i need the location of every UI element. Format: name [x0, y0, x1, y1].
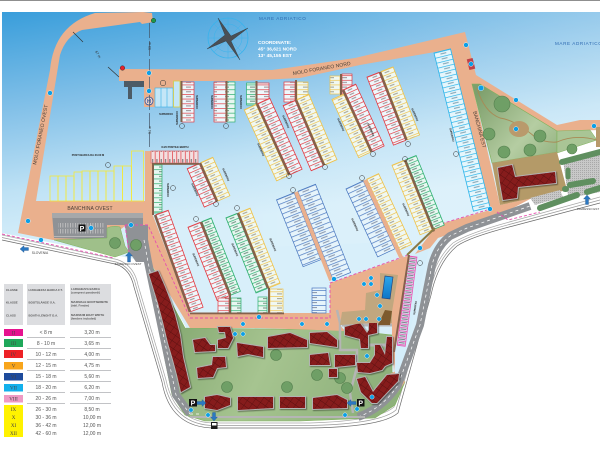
- legend: header panels: MAXIMALE BOOTSBREITE: [71, 300, 108, 304]
- pier captions: SUPERFICI: [268, 237, 277, 252]
- pier captions: SUPERFICI: [195, 95, 199, 109]
- east channel pink berths: [397, 256, 417, 346]
- legend: boat length values: [35, 330, 57, 437]
- legend: boat width values: 12,00 m: [83, 423, 101, 429]
- harbour lights: [120, 18, 156, 70]
- helipad pier: [145, 81, 180, 107]
- pier letter rings: [106, 80, 458, 266]
- quay dashed safety line: [125, 210, 540, 318]
- legend: header panels: KLASSE: [6, 300, 18, 304]
- legend: boat length values: 30 - 36 m: [35, 415, 57, 421]
- moored vehicle: [467, 58, 475, 70]
- legend: boat length values: 15 - 18 m: [35, 374, 57, 380]
- legend: class swatches: X: [12, 416, 16, 421]
- pier captions: SUPERFICI: [166, 183, 170, 197]
- legend: class swatches: III: [11, 342, 16, 347]
- south blue block: [312, 288, 326, 313]
- pier B: [214, 81, 235, 122]
- coordinates: 45° 36,621 NORD: [258, 46, 297, 52]
- pier captions: SUPERFICI: [412, 300, 418, 315]
- pier captions: SUPERFICI: [256, 142, 266, 157]
- legend: boat width values: 8,50 m: [84, 407, 100, 413]
- west garden: [54, 226, 129, 257]
- legend: boat length values: 8 - 10 m: [37, 341, 55, 347]
- coordinates: 13° 45,155 EST: [258, 53, 292, 59]
- service markers: [26, 43, 596, 417]
- place labels: SLOVENIA: [32, 251, 49, 255]
- pier I foot: [258, 288, 283, 313]
- pier E top: [330, 74, 352, 96]
- legend: header panels: (fenders included): [71, 316, 96, 320]
- pier L: [392, 156, 445, 237]
- legend: row dividers: [27, 338, 111, 404]
- place labels: MOLO FORANEO OVEST: [32, 104, 50, 165]
- place labels: BANCHINA OVEST: [67, 206, 113, 212]
- legend: boat length values: 36 - 42 m: [35, 423, 57, 429]
- sea labels: MARE ADRIATICO: [259, 16, 306, 21]
- legend: boat width values: 6,20 m: [84, 385, 100, 391]
- buildings: [149, 165, 556, 410]
- legend: boat length values: 12 - 15 m: [35, 363, 57, 369]
- pier captions: SUPERFICI: [190, 182, 200, 197]
- legend: boat width values: 4,75 m: [84, 363, 100, 369]
- pier C diagonal: [244, 98, 302, 181]
- legend: header panels: CLASS: [6, 314, 16, 318]
- legend: header panels: [4, 284, 111, 325]
- place labels: MOLO FORANEO NORD: [292, 61, 352, 77]
- pier captions: SUPERFICI: [159, 112, 173, 116]
- pier D diagonal: [283, 94, 337, 171]
- fuel dock: [124, 81, 144, 99]
- place labels: INGRESSO EST: [577, 207, 599, 211]
- legend: boat length values: < 8 m: [40, 330, 52, 336]
- west wharf green row: [152, 163, 162, 215]
- place labels: [32, 61, 599, 266]
- north wharf row: [151, 151, 199, 165]
- access arrows: [20, 195, 590, 421]
- legend: boat width values: 3,65 m: [84, 341, 100, 347]
- parking signs: P: [191, 400, 196, 408]
- east long cyan berths: [434, 49, 490, 211]
- parking signs: P: [80, 226, 85, 233]
- place labels: INGRESSO OVEST: [115, 262, 142, 266]
- pier captions: SUPERFICI: [448, 128, 456, 142]
- land: south gardens: [146, 265, 405, 421]
- pier I diagonal: [226, 208, 280, 293]
- pier captions: SUPERFICI: [366, 122, 376, 137]
- legend: boat length values: 20 - 26 m: [35, 396, 57, 402]
- legend: class swatches: V: [12, 364, 16, 370]
- legend: boat length values: 26 - 30 m: [35, 407, 57, 413]
- legend: class swatches: II: [12, 332, 15, 336]
- pier E diagonal: [330, 84, 384, 158]
- harbour mouth measurements: 53 m: [148, 42, 152, 50]
- pier captions: SUPERFICI: [401, 202, 411, 217]
- legend: boat length values: 18 - 20 m: [35, 385, 57, 391]
- legend: header panels: CLASSE: [6, 288, 18, 292]
- place labels: BANCHINA EST: [471, 111, 487, 149]
- east channel wall: [394, 255, 409, 352]
- bus icon: [211, 422, 218, 429]
- west entrance road: [125, 225, 150, 262]
- legend: boat width values: 4,00 m: [84, 352, 100, 358]
- harbour mouth measurements: [73, 23, 152, 150]
- east water channel: [395, 248, 429, 383]
- quay: south and east of the basin: [125, 213, 410, 372]
- west berths class IX-XII: [50, 151, 144, 201]
- west parking: [52, 213, 143, 240]
- legend: boat width values: 7,00 m: [84, 396, 100, 402]
- pier captions: [72, 95, 456, 315]
- parking signs: P: [358, 400, 363, 408]
- pier H foot: [218, 294, 241, 313]
- parking signs: [78, 224, 364, 408]
- legend: header panels: BOATH LENGHT O.A.: [28, 314, 58, 318]
- pier captions: SUPERFICI: [221, 167, 231, 182]
- pier captions: SUPERFICI: [281, 114, 291, 129]
- legend: boat length values: 42 - 60 m: [35, 431, 57, 437]
- pier captions: SUPERFICI: [191, 252, 200, 267]
- pier captions: N.20 PONTILE BERTH: [161, 145, 189, 149]
- pier D top: [284, 80, 308, 102]
- pier captions: SUPERFICI: [336, 117, 346, 132]
- pier captions: SUPERFICI: [175, 111, 179, 125]
- pier A: [180, 81, 194, 122]
- legend: boat width values: 3,20 m: [84, 330, 100, 336]
- legend: header panels: MAXIMUM BOAT WIDTH: [71, 313, 104, 317]
- legend: boat width values: 5,60 m: [84, 374, 100, 380]
- road corridor: [2, 197, 600, 428]
- crescent courtyard: [360, 371, 405, 404]
- pier captions: SUPERFICI: [210, 95, 214, 109]
- pier K: [346, 174, 415, 267]
- legend: boat width values: 10,00 m: [83, 415, 101, 421]
- compass rose: [207, 18, 248, 60]
- harbour mouth measurements: 67 m: [94, 50, 102, 59]
- legend: header panels: (inkl. Fender): [71, 304, 89, 308]
- pier captions: POSTI BARCA DA 30-60 M: [72, 153, 104, 157]
- main service road: [144, 206, 530, 417]
- legend: class swatches: IV: [11, 353, 17, 358]
- east entrance hedges: [540, 152, 600, 208]
- helipad pier: H: [147, 99, 151, 105]
- legend: class swatches: XI: [11, 424, 16, 429]
- sea labels: [259, 16, 600, 46]
- legend: class swatches: VI: [11, 376, 16, 380]
- pier H diagonal: [188, 218, 240, 301]
- pier captions: SUPERFICI: [350, 217, 360, 232]
- legend: class swatches: VII: [10, 386, 17, 392]
- legend: boat width values: 12,00 m: [83, 431, 101, 437]
- east park: [472, 84, 600, 205]
- coordinates: [258, 40, 297, 59]
- pier J blue: [276, 184, 351, 288]
- pier F: [367, 67, 420, 145]
- east parking hatch: [530, 150, 600, 205]
- pier C top: [246, 81, 269, 105]
- legend: class swatches: VIII: [9, 398, 18, 402]
- legend: class swatches: [4, 329, 23, 437]
- legend: boat width values: [83, 330, 101, 437]
- top rule: [0, 0, 600, 1]
- gangway: [407, 228, 435, 255]
- coordinates: COORDINATE:: [258, 40, 292, 46]
- pier captions: SUPERFICI: [230, 242, 239, 257]
- legend: header panels: LUNGHEZZA BARCA F.T.: [28, 288, 63, 292]
- legend: class swatches: XII: [10, 432, 17, 437]
- harbour mouth measurements: 54 m: [148, 126, 152, 134]
- legend: header panels: (compresi parabordi): [71, 290, 100, 294]
- legend: header panels: BOOTSLÄNGE Ü.A.: [28, 300, 56, 304]
- bottom wall: [190, 312, 284, 314]
- trees: [110, 96, 577, 394]
- legend: header panels: LARGHEZZA BARCA: [71, 287, 101, 291]
- west wharf red diagonal: [154, 210, 203, 312]
- legend: class swatches: IX: [11, 408, 17, 413]
- legend: boat length values: 10 - 12 m: [35, 352, 57, 358]
- pier captions: SUPERFICI: [410, 107, 420, 122]
- pier captions: SUPERFICI: [239, 95, 243, 109]
- molo foraneo ovest breakwater: [18, 12, 153, 240]
- pier G: [187, 157, 230, 207]
- east basin pool and terrace: [340, 273, 398, 325]
- molo foraneo nord and head: [119, 32, 600, 254]
